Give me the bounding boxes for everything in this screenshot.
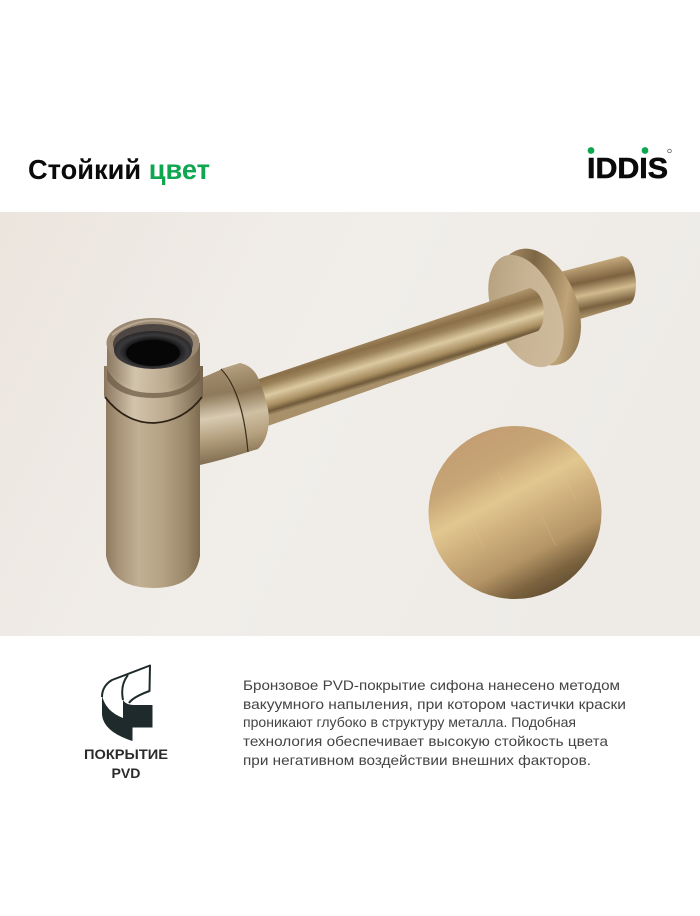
title: Стойкий цвет	[28, 154, 210, 185]
description text: Бронзовое PVD-покрытие сифона нанесено методом	[243, 677, 620, 693]
product photo: bronze siphon	[104, 236, 636, 588]
top cap ring	[106, 318, 200, 398]
description text: технология обеспечивает высокую стойкость цвета	[243, 733, 608, 749]
icon: PVD coating	[102, 666, 152, 741]
pipe collar	[221, 363, 269, 452]
icon caption: coating PVD: PVD	[112, 765, 140, 781]
description text	[243, 677, 626, 768]
middle band and groove	[104, 366, 203, 423]
description text: проникают глубоко в структуру металла. Подобная	[243, 714, 576, 730]
elbow joint	[192, 368, 250, 467]
wall flange	[473, 236, 597, 378]
icon caption: coating PVD	[84, 746, 168, 781]
panel: product photo background	[0, 212, 700, 636]
material swatch disc	[428, 426, 602, 599]
description text: вакуумного напыления, при котором частички краски	[243, 696, 626, 712]
logo: IDDIS: IDDIS	[587, 153, 668, 185]
icon caption: coating PVD: ПОКРЫТИЕ	[84, 746, 168, 762]
description text: при негативном воздействии внешних факторов.	[243, 752, 591, 768]
vertical body	[106, 400, 200, 588]
rear stub pipe	[560, 256, 636, 322]
long horizontal pipe	[250, 288, 544, 428]
